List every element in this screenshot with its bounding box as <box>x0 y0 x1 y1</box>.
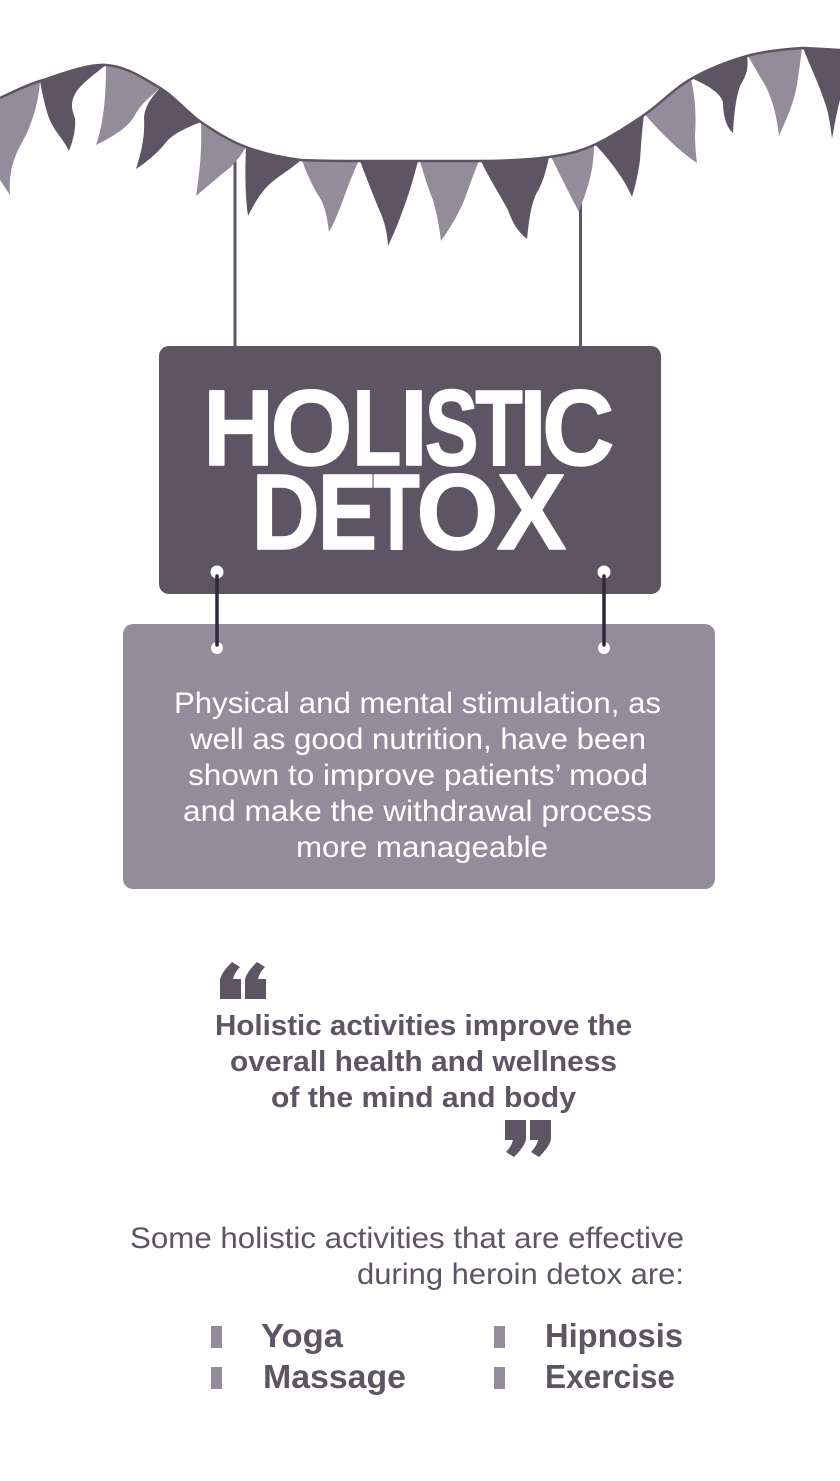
quote text: of the mind and body <box>271 1082 576 1114</box>
intro text: Some holistic activities that are effective <box>130 1222 684 1255</box>
title <box>203 367 614 572</box>
panel: title sign <box>159 346 661 594</box>
title: O <box>270 367 353 488</box>
title: T <box>373 451 420 572</box>
connector: right <box>598 566 610 654</box>
item: exercise: Exercise <box>545 1358 675 1395</box>
icon: closing quote mark <box>505 1120 551 1157</box>
description text: and make the withdrawal process <box>183 795 652 828</box>
title: L <box>352 367 402 488</box>
connector: left <box>210 566 224 654</box>
title: I <box>400 367 428 488</box>
quote text: Holistic activities improve the <box>215 1010 632 1042</box>
title: I <box>519 367 547 488</box>
item: exercise <box>494 1358 675 1395</box>
description text: well as good nutrition, have been <box>189 723 646 756</box>
bunting banner <box>0 48 840 246</box>
activities list <box>211 1317 683 1395</box>
intro text <box>130 1222 684 1291</box>
item: yoga: Yoga <box>261 1317 344 1354</box>
title: E <box>318 451 377 572</box>
description text: more manageable <box>296 831 548 864</box>
intro text: during heroin detox are: <box>357 1258 684 1291</box>
item: hipnosis: Hipnosis <box>545 1317 683 1354</box>
title: X <box>497 451 566 572</box>
description text: Physical and mental stimulation, as <box>174 687 661 720</box>
dark flags <box>40 48 840 246</box>
panel: description <box>123 624 715 889</box>
title: D <box>252 451 320 572</box>
title: O <box>416 451 499 572</box>
rope <box>0 48 840 161</box>
item: massage: Massage <box>263 1358 406 1395</box>
item: yoga <box>211 1317 344 1354</box>
quote text: overall health and wellness <box>230 1046 617 1078</box>
title: T <box>475 367 523 488</box>
title: C <box>542 367 614 488</box>
icon: opening quote mark <box>220 962 266 999</box>
title: S <box>425 367 479 488</box>
quote text <box>215 1010 632 1114</box>
light flags <box>0 48 802 241</box>
description text <box>174 687 661 864</box>
description text: shown to improve patients’ mood <box>188 759 648 792</box>
hanging posts <box>234 158 582 347</box>
title: H <box>203 367 274 488</box>
